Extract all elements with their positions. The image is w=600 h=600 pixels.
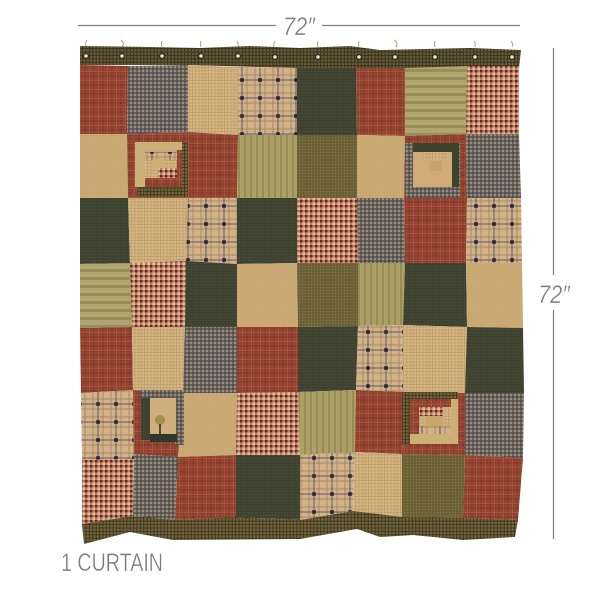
patchwork row 7: [82, 452, 523, 524]
patchwork row 2: [80, 132, 521, 198]
patchwork row 4: [80, 261, 523, 328]
top band with grommets: [80, 46, 521, 68]
patchwork row 3: [80, 198, 522, 264]
patchwork row 5: [80, 325, 524, 393]
log cabin block: red and olive: [402, 392, 458, 444]
caption: 1 curtain: 1 CURTAIN: [61, 549, 163, 577]
log cabin block: navy and green: [405, 143, 460, 198]
bottom hem: [82, 511, 518, 544]
log cabin block: tree with dark green: [140, 390, 184, 445]
log cabin block: red and cream: [135, 142, 188, 197]
top width dimension: 72 inches: 72″: [283, 13, 316, 41]
patchwork row 1: [80, 65, 519, 136]
patchwork row 6: [81, 390, 524, 460]
shower curtain: [80, 46, 524, 544]
side height dimension: 72 inches: 72″: [538, 281, 571, 309]
curtain rings: [86, 40, 513, 47]
